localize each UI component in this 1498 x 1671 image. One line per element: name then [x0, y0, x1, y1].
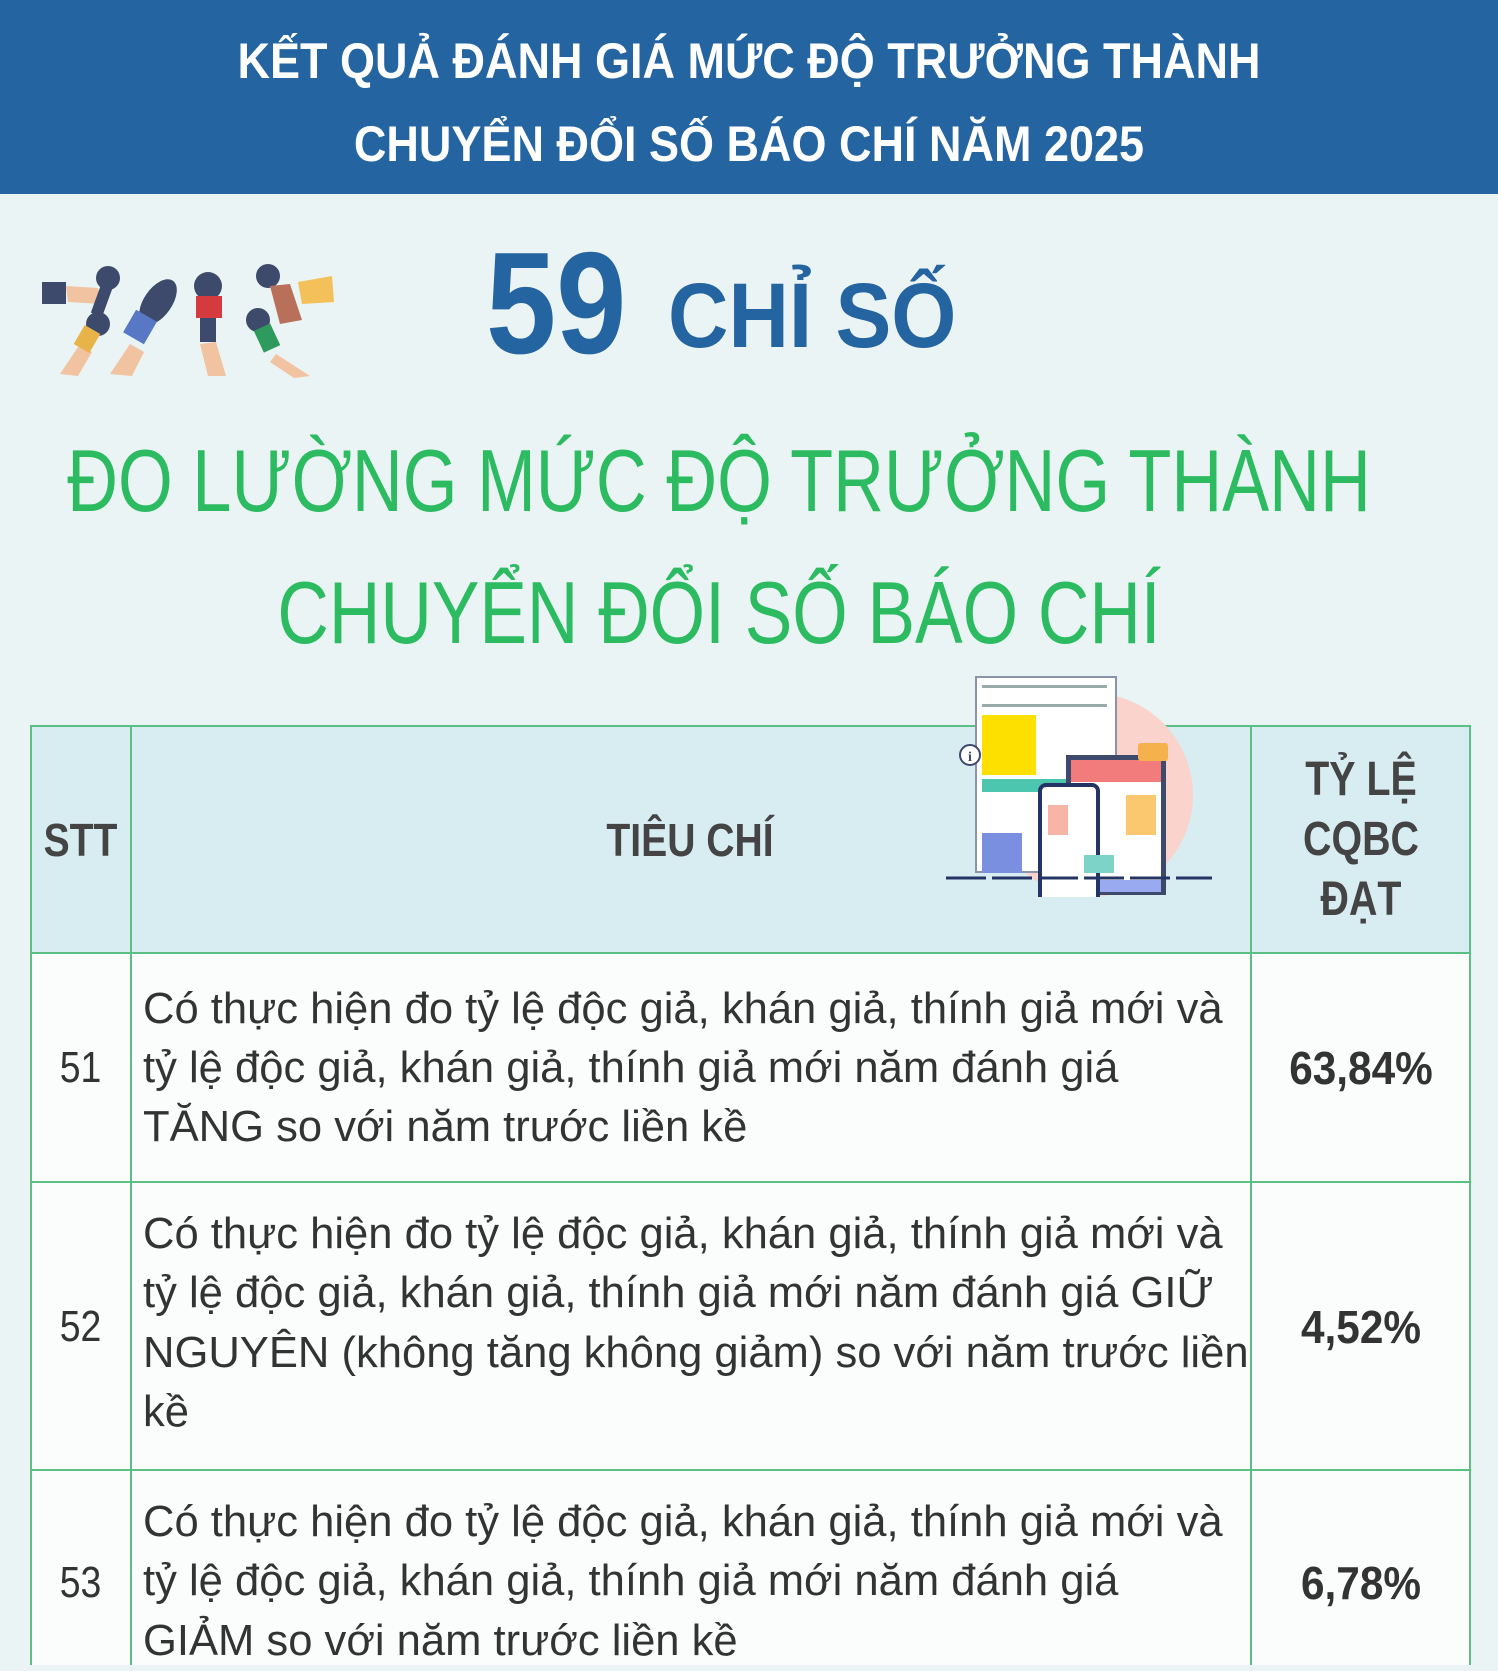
row 52 text: NGUYÊN (không tăng không giảm) so với năm trước liền	[143, 1328, 1249, 1377]
table	[30, 725, 1471, 1665]
row 53	[60, 1557, 1421, 1609]
header: TỶ LỆ CQBC ĐẠT: TỶ LỆ	[1305, 753, 1417, 806]
row 53 text: tỷ lệ độc giả, khán giả, thính giả mới năm đánh giá	[143, 1556, 1118, 1605]
big number: 59 chỉ số: 59	[486, 222, 626, 384]
title line 1: KẾT QUẢ ĐÁNH GIÁ MỨC ĐỘ TRƯỞNG THÀNH	[237, 33, 1260, 89]
subtitle line 2: CHUYỂN ĐỔI SỐ BÁO CHÍ	[277, 563, 1161, 662]
icon: newspaper and devices	[946, 676, 1212, 897]
row 52 text: kề	[143, 1387, 189, 1436]
header banner	[0, 0, 1498, 194]
big number: 59 chỉ số: CHỈ SỐ	[668, 265, 956, 367]
subtitle line 1: ĐO LƯỜNG MỨC ĐỘ TRƯỞNG THÀNH	[67, 431, 1371, 530]
row 53 text: Có thực hiện đo tỷ lệ độc giả, khán giả, thính giả mới và	[143, 1497, 1223, 1546]
big number: 59 chỉ số	[486, 222, 956, 384]
percentage 63,84%: 63,84%	[1289, 1042, 1433, 1094]
header: TỶ LỆ CQBC ĐẠT: ĐẠT	[1321, 873, 1401, 926]
row 53 text	[143, 1497, 1223, 1665]
row 51 text: Có thực hiện đo tỷ lệ độc giả, khán giả, thính giả mới và	[143, 984, 1223, 1033]
header: STT: STT	[44, 814, 117, 866]
row 52 text: Có thực hiện đo tỷ lệ độc giả, khán giả, thính giả mới và	[143, 1209, 1223, 1258]
title line 2: CHUYỂN ĐỔI SỐ BÁO CHÍ NĂM 2025	[354, 116, 1144, 172]
percentage 6,78%: 6,78%	[1301, 1557, 1421, 1609]
row 51 text: TĂNG so với năm trước liền kề	[143, 1102, 747, 1151]
header: TIÊU CHÍ: TIÊU CHÍ	[606, 814, 774, 866]
row 53 text: GIẢM so với năm trước liền kề	[143, 1616, 738, 1665]
row 51 text: tỷ lệ độc giả, khán giả, thính giả mới năm đánh giá	[143, 1043, 1118, 1092]
row 51	[60, 1042, 1433, 1094]
icon: microphones	[42, 264, 334, 378]
table header row	[30, 725, 1471, 954]
row number 51: 51	[60, 1043, 101, 1092]
header: TỶ LỆ CQBC ĐẠT	[1303, 752, 1419, 926]
header: TỶ LỆ CQBC ĐẠT: CQBC	[1303, 813, 1419, 866]
row 52	[60, 1301, 1421, 1353]
icon: newspaper and devices: i	[968, 750, 972, 765]
row 52 text: tỷ lệ độc giả, khán giả, thính giả mới năm đánh giá GIỮ	[143, 1268, 1214, 1317]
row number 53: 53	[60, 1558, 101, 1607]
row number 52: 52	[60, 1302, 101, 1351]
row 51 text	[143, 984, 1223, 1151]
row 52 text	[143, 1209, 1249, 1436]
percentage 4,52%: 4,52%	[1301, 1301, 1421, 1353]
